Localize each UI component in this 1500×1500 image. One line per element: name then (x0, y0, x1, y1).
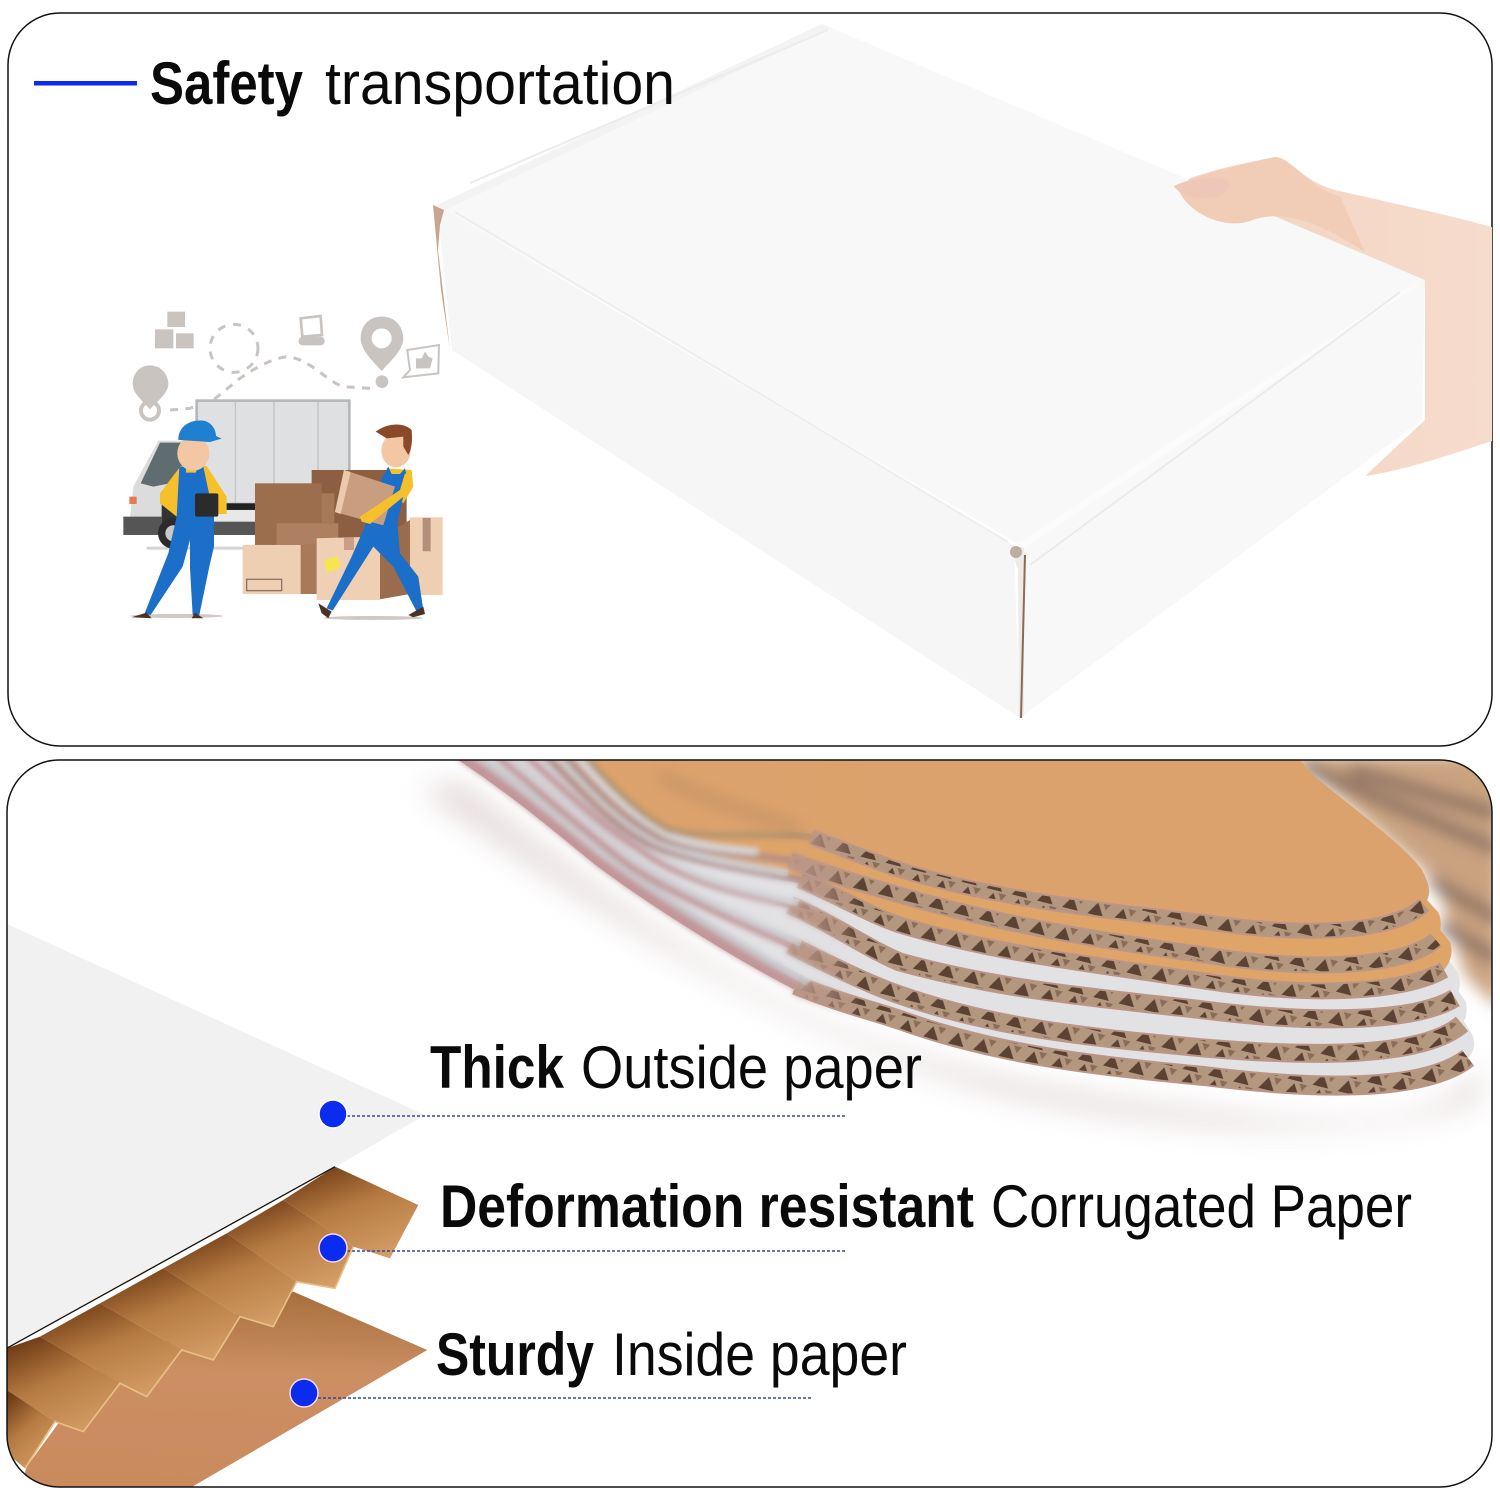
heading: safety transportation (34, 50, 675, 117)
callout: thick outside paper: Outside paper (581, 1034, 922, 1101)
blurred near part of stack (456, 760, 852, 1014)
heading: safety transportation: transportation (325, 50, 675, 117)
panel: safety transportation (8, 13, 1495, 746)
illustration: delivery workers, truck and boxes (123, 312, 443, 620)
callout: sturdy inside paper: Inside paper (612, 1321, 907, 1388)
soft shadow under stack (420, 780, 1480, 1129)
callout: thick outside paper (319, 1034, 922, 1128)
truck (123, 401, 349, 550)
photo: hand holding white mailer box (433, 24, 1495, 718)
blurred far boards (1290, 755, 1500, 1010)
corrugated flute edges (790, 837, 1468, 1086)
callout: deformation resistant corrugated paper: Deformation resistant (440, 1173, 974, 1240)
worker with clipboard (130, 420, 227, 618)
corrugated flute ridges (7, 1167, 418, 1468)
callout: sturdy inside paper: Sturdy (436, 1321, 595, 1388)
white box (433, 24, 1425, 718)
thumb (1176, 157, 1365, 252)
hand behind box (1175, 157, 1495, 476)
callout: deformation resistant corrugated paper: Corrugated Paper (991, 1173, 1412, 1240)
thumbnail (1174, 181, 1186, 192)
callout: thick outside paper: Thick (430, 1034, 565, 1101)
icons: logistics route (133, 312, 439, 420)
inside paper sheet (7, 1167, 427, 1490)
panel outline (7, 760, 1492, 1487)
cardboard boxes (243, 470, 443, 600)
board layers, bottom to top (460, 752, 1474, 1086)
callout: deformation resistant corrugated paper (319, 1173, 1412, 1262)
callout: sturdy inside paper (290, 1321, 907, 1407)
photo: stack of corrugated boards (7, 752, 1500, 1490)
panel: corrugated paper structure (7, 752, 1500, 1490)
heading: safety transportation: Safety (150, 50, 304, 117)
worker carrying box (318, 425, 425, 620)
outside paper sheet (7, 924, 425, 1348)
blurred dark streak on top board (660, 775, 800, 830)
